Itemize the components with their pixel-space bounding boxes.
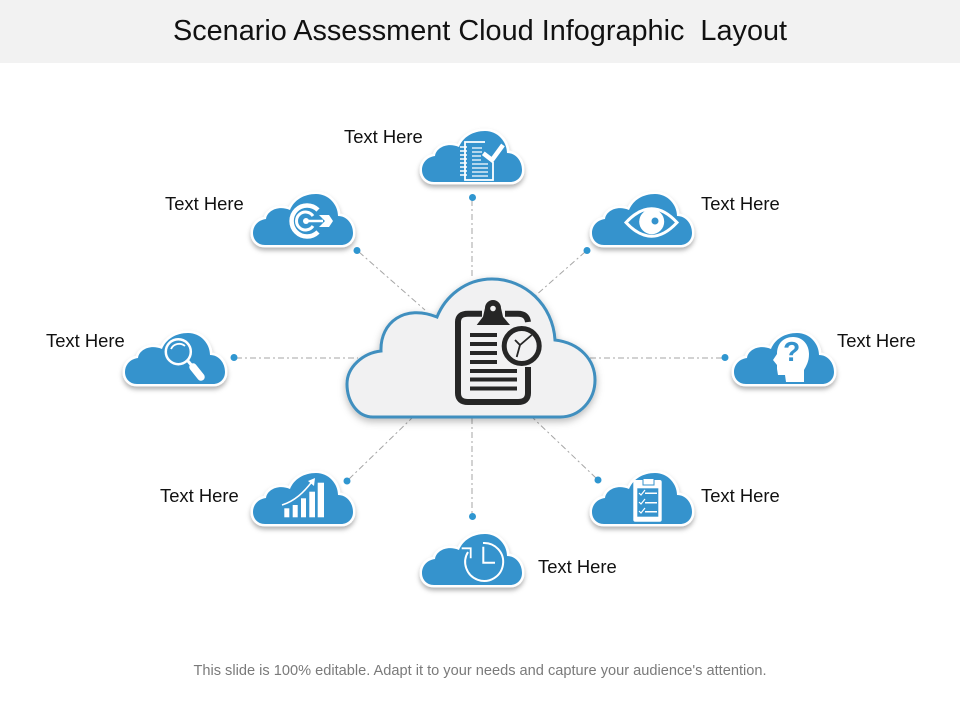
label: left: Text Here <box>46 330 125 351</box>
cloud: magnifier <box>125 333 225 384</box>
icon: target and arrow <box>292 206 333 236</box>
label: lower left: Text Here <box>160 485 239 506</box>
icon: magnifying glass <box>166 339 201 377</box>
label: lower right: Text Here <box>701 485 780 506</box>
cloud: target <box>253 194 353 245</box>
label: upper left: Text Here <box>165 193 244 214</box>
footer note: This slide is 100% editable. Adapt it to your needs and capture your audience's attention. <box>193 663 767 679</box>
icon: eye <box>626 209 677 236</box>
label: upper right: Text Here <box>701 193 780 214</box>
central cloud <box>347 279 595 417</box>
connector lines <box>236 200 723 514</box>
connector dots <box>230 194 728 520</box>
icon: head question mark: ? <box>783 336 800 367</box>
cloud: clock <box>422 534 522 585</box>
icon: clipboard with clock <box>458 300 539 402</box>
cloud: head with question <box>734 333 834 384</box>
label: right: Text Here <box>837 330 916 351</box>
cloud: clipboard checklist <box>592 473 692 524</box>
cloud: growth chart <box>253 473 353 524</box>
title: Scenario Assessment Cloud Infographic Layout <box>173 15 787 47</box>
icon: notebook check <box>460 142 503 180</box>
header band <box>0 0 960 63</box>
label: top: Text Here <box>344 126 423 147</box>
icon: bar chart with arrow <box>282 478 324 517</box>
cloud: eye <box>592 194 692 245</box>
cloud: checklist notebook <box>422 131 522 182</box>
icon: clipboard <box>633 478 662 522</box>
icon: clock with arrow <box>462 543 503 581</box>
label: bottom: Text Here <box>538 556 617 577</box>
